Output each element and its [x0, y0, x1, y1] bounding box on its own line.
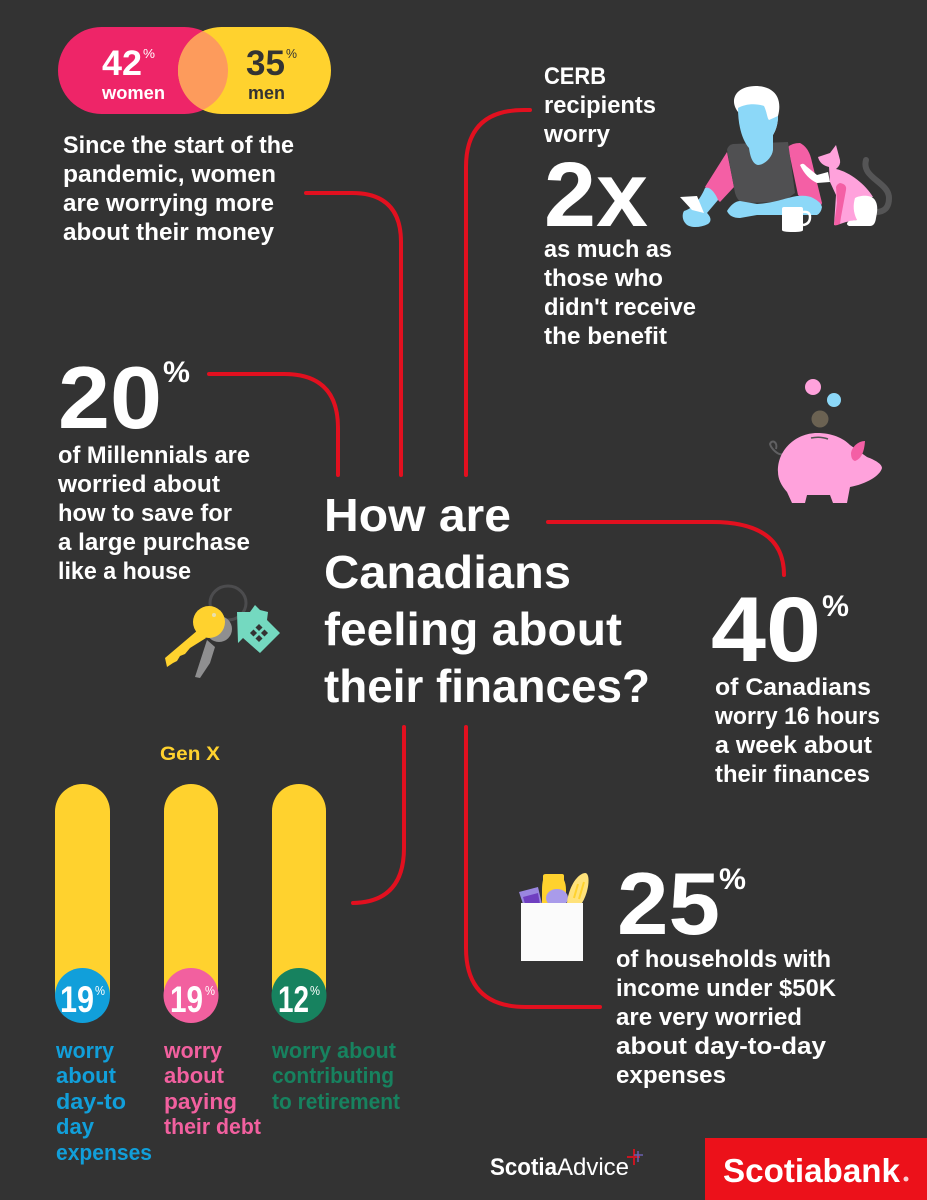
- bar 1: 19: [60, 979, 94, 1020]
- label: Gen X: Gen X: [160, 744, 220, 765]
- text: worry about contributing to retirement: worry about: [271, 1038, 397, 1063]
- bar 2: %: [205, 983, 215, 998]
- text: CERB recipients: CERB: [544, 63, 606, 90]
- logo: ScotiaAdvice: Advice: [557, 1154, 629, 1181]
- stat: 20% of Millennials: [57, 348, 250, 585]
- women stat: [101, 44, 165, 103]
- connector lines: [209, 110, 784, 1007]
- title: [324, 489, 650, 712]
- stat: 20% of Millennials: worried about: [57, 471, 220, 498]
- title: feeling about: [324, 603, 622, 655]
- men stat: [246, 44, 297, 103]
- bar 1: [55, 784, 110, 1023]
- text: CERB recipients: those who: [544, 265, 663, 292]
- text: CERB recipients: 2x: [544, 144, 648, 246]
- bar 2: [164, 784, 218, 1023]
- women pill: [58, 27, 228, 114]
- text: worry about day-to-day expenses: worry: [55, 1038, 115, 1063]
- text: worry about day-to-day expenses: [55, 1038, 152, 1165]
- stat: 40% of Canadians: 40: [711, 579, 821, 681]
- stat: 25% of households: [616, 854, 837, 1089]
- bar 3: [272, 784, 326, 1023]
- text: worry about contributing to retirement: contributing: [272, 1063, 394, 1088]
- stat: 25% of households: expenses: [616, 1062, 726, 1089]
- text: CERB recipients: didn't receive: [544, 294, 696, 321]
- text: worry about paying their debt: [163, 1038, 262, 1139]
- bar 3: 12: [278, 979, 309, 1020]
- text: worry about contributing to retirement: [271, 1038, 401, 1114]
- text: worry about contributing to retirement: to retirement: [272, 1089, 401, 1114]
- chart: Gen X worries: [55, 784, 326, 1023]
- text: worry about day-to-day expenses: about: [56, 1063, 117, 1088]
- men stat: men: [248, 83, 285, 103]
- men stat: 35: [246, 44, 285, 83]
- icon: keys with house fob: [165, 586, 280, 678]
- text: women worrying more: Since the start of the: [63, 132, 294, 159]
- stat: 25% of households: of households with: [616, 946, 831, 973]
- text: women worrying more: are worrying more: [63, 190, 274, 217]
- stat: 25% of households: 25: [617, 854, 720, 953]
- stat: 20% of Millennials: of Millennials are: [58, 442, 250, 469]
- stat: 40% of Canadians: their finances: [715, 761, 870, 788]
- men pill: [178, 27, 331, 114]
- women stat: women: [101, 83, 165, 103]
- title: their finances?: [324, 660, 650, 712]
- panel: women vs men worry: [58, 27, 331, 114]
- logo: ScotiaAdvice: Scotia: [490, 1154, 558, 1181]
- women stat: 42: [102, 44, 142, 83]
- stat: 20% of Millennials: how to save for: [58, 500, 232, 527]
- icon: person with cat: [680, 86, 889, 232]
- stat: 20% of Millennials: like a house: [58, 558, 191, 585]
- text: CERB recipients: [543, 63, 696, 350]
- text: women worrying more: [63, 132, 294, 246]
- stat: 40% of Canadians: worry 16 hours: [714, 703, 880, 730]
- stat: 20% of Millennials: 20: [58, 348, 162, 447]
- title: How are: [324, 489, 511, 541]
- icon: grocery bag: [519, 873, 589, 961]
- text: worry about paying their debt: their debt: [164, 1114, 262, 1139]
- text: women worrying more: about their money: [63, 219, 275, 246]
- logo: Scotiabank: Scotiabank: [723, 1152, 901, 1189]
- bar 1: %: [95, 983, 105, 998]
- title: Canadians: [324, 546, 571, 598]
- stat: 25% of households: about day-to-day: [616, 1033, 827, 1060]
- stat: 40% of Canadians: a week about: [715, 732, 872, 759]
- bar 3: %: [310, 983, 320, 998]
- icon: piggy bank with coins: [770, 379, 882, 503]
- stat: 25% of households: %: [719, 863, 746, 896]
- text: CERB recipients: recipients: [544, 92, 656, 119]
- text: worry about paying their debt: worry: [163, 1038, 223, 1063]
- text: worry about paying their debt: paying: [164, 1089, 237, 1114]
- stat: 40% of Canadians: [711, 579, 880, 788]
- women stat: %: [143, 46, 155, 61]
- text: women worrying more: pandemic, women: [63, 161, 276, 188]
- stat: 40% of Canadians: %: [822, 590, 849, 623]
- text: worry about day-to-day expenses: expenses: [56, 1140, 152, 1165]
- stat: 40% of Canadians: of Canadians: [715, 674, 871, 701]
- stat: 25% of households: are very worried: [616, 1004, 802, 1031]
- text: worry about day-to-day expenses: day: [56, 1114, 95, 1139]
- text: CERB recipients: as much as: [544, 236, 672, 263]
- logo: ScotiaAdvice: [490, 1149, 643, 1181]
- stat: 20% of Millennials: %: [163, 356, 190, 389]
- text: CERB recipients: worry: [543, 121, 611, 148]
- text: worry about day-to-day expenses: day-to: [56, 1089, 126, 1114]
- men stat: %: [286, 46, 297, 61]
- text: CERB recipients: the benefit: [544, 323, 667, 350]
- overlap: [178, 31, 228, 110]
- stat: 25% of households: income under $50K: [616, 975, 837, 1002]
- text: worry about paying their debt: about: [164, 1063, 225, 1088]
- logo: Scotiabank: [705, 1138, 927, 1200]
- stat: 20% of Millennials: a large purchase: [58, 529, 250, 556]
- bar 2: 19: [170, 979, 203, 1020]
